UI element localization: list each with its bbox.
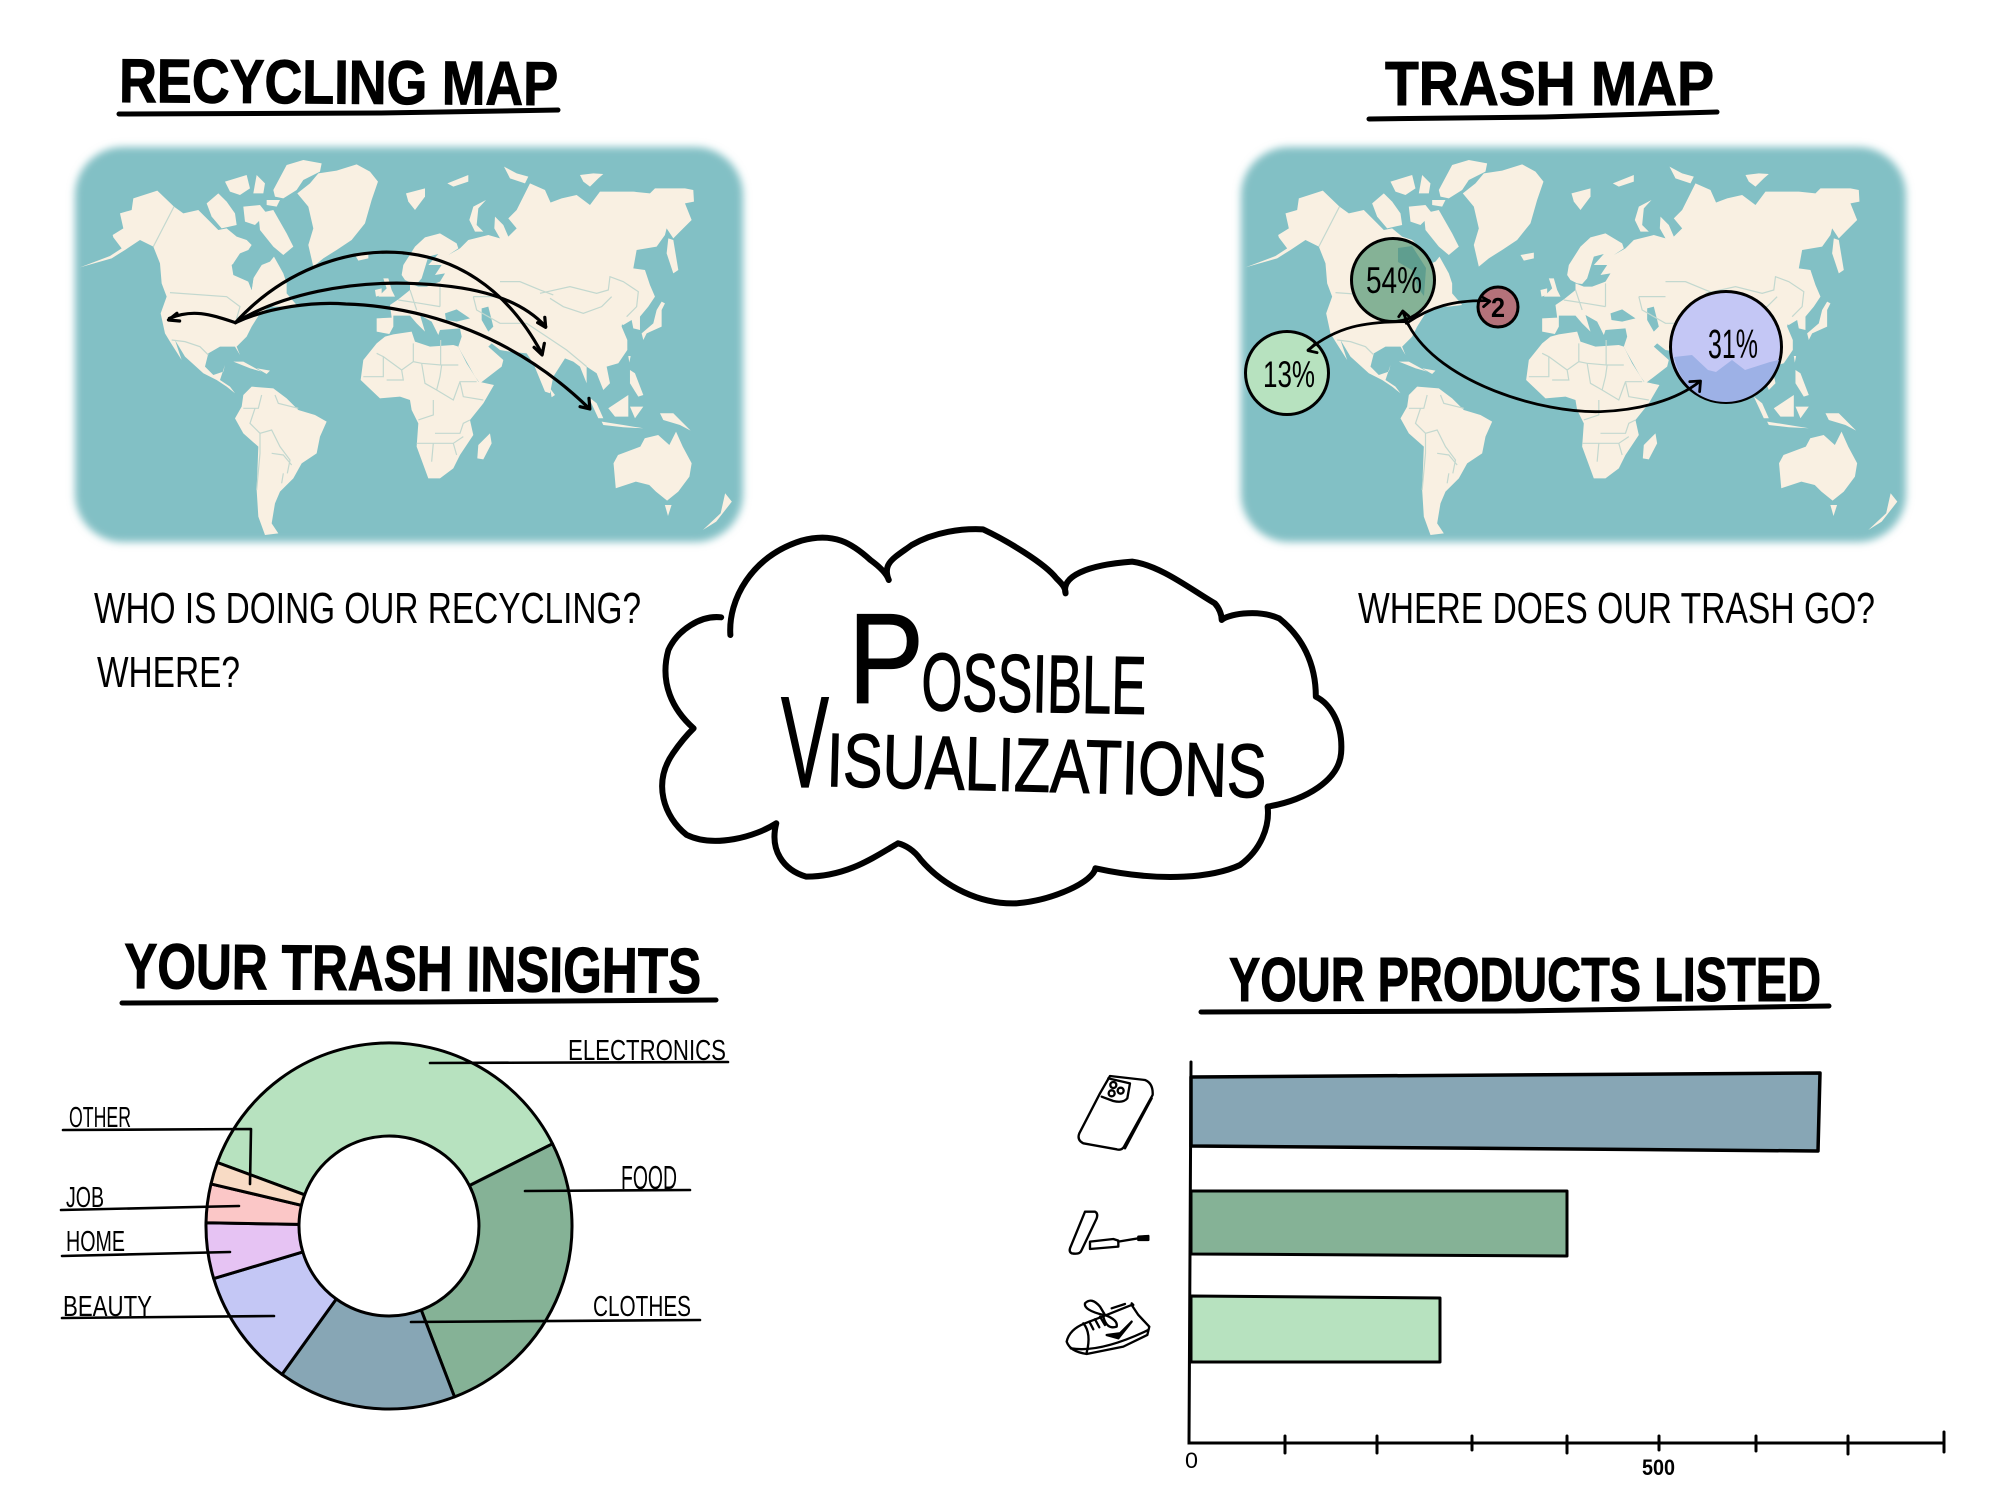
bubble: 31% bbox=[1670, 292, 1782, 402]
bubble: 13%: 13% bbox=[1263, 354, 1315, 395]
bar: shoes bbox=[1191, 1296, 1440, 1362]
title: possible visualizations: V bbox=[781, 669, 829, 815]
bar chart: products listed bbox=[1185, 1062, 1944, 1480]
segment: electronics bbox=[217, 1043, 553, 1195]
donut labels and leader lines: CLOTHES bbox=[593, 1291, 691, 1323]
donut labels and leader lines: FOOD bbox=[621, 1159, 677, 1196]
bubble: 13% bbox=[1246, 332, 1328, 414]
donut labels and leader lines: BEAUTY bbox=[63, 1291, 152, 1323]
axis label: 500: 500 bbox=[1642, 1455, 1675, 1480]
text: recycling questions: WHO IS DOING OUR RECYCLING? bbox=[94, 584, 641, 633]
donut labels and leader lines: JOB bbox=[66, 1182, 104, 1214]
bubble: 31%: 31% bbox=[1708, 321, 1758, 367]
title: possible visualizations: P bbox=[848, 588, 924, 731]
axis label: 0: 0 bbox=[1185, 1448, 1198, 1473]
bubble: 2 bbox=[1478, 287, 1518, 327]
donut labels and leader lines: OTHER bbox=[69, 1102, 131, 1134]
segment: home bbox=[206, 1223, 303, 1279]
title: possible visualizations bbox=[781, 588, 1268, 815]
bubble: 2: 2 bbox=[1491, 292, 1505, 323]
panel: trash world map bbox=[1241, 147, 1906, 542]
donut labels and leader lines: HOME bbox=[66, 1226, 125, 1258]
segment: food bbox=[421, 1144, 572, 1397]
arrows: recycling routes from the US bbox=[168, 252, 590, 409]
donut labels and leader lines bbox=[61, 1035, 728, 1323]
bar: chargers bbox=[1191, 1191, 1567, 1256]
heading: your trash insights: YOUR TRASH INSIGHTS bbox=[124, 930, 701, 1007]
title: possible visualizations: ISUALIZATIONS bbox=[826, 718, 1268, 815]
segment: other bbox=[211, 1162, 305, 1205]
bar: phones bbox=[1191, 1073, 1820, 1151]
segment: clothes bbox=[282, 1299, 454, 1409]
heading: your products listed: YOUR PRODUCTS LISTED bbox=[1229, 946, 1821, 1015]
text: recycling questions: WHERE? bbox=[97, 648, 240, 697]
heading: recycling map: RECYCLING MAP bbox=[119, 47, 558, 119]
icon: phone bbox=[1079, 1076, 1153, 1150]
arrows: trash routes from the US bbox=[1308, 297, 1701, 412]
donut labels and leader lines: ELECTRONICS bbox=[568, 1035, 726, 1067]
bubble: 54%: 54% bbox=[1366, 260, 1422, 301]
axes bbox=[1189, 1062, 1944, 1454]
segment: job bbox=[206, 1184, 301, 1224]
title: possible visualizations: OSSIBLE bbox=[921, 637, 1147, 732]
bubble: 54% bbox=[1352, 238, 1434, 322]
panel: recycling world map bbox=[75, 147, 743, 542]
donut chart: trash by category bbox=[206, 1043, 572, 1409]
cloud with central title bbox=[662, 529, 1341, 903]
segment: beauty bbox=[214, 1252, 336, 1374]
text: recycling questions bbox=[94, 584, 641, 697]
icon: charger and cable bbox=[1070, 1212, 1148, 1254]
icon: sneaker bbox=[1067, 1301, 1149, 1354]
heading: trash map: TRASH MAP bbox=[1385, 50, 1714, 119]
